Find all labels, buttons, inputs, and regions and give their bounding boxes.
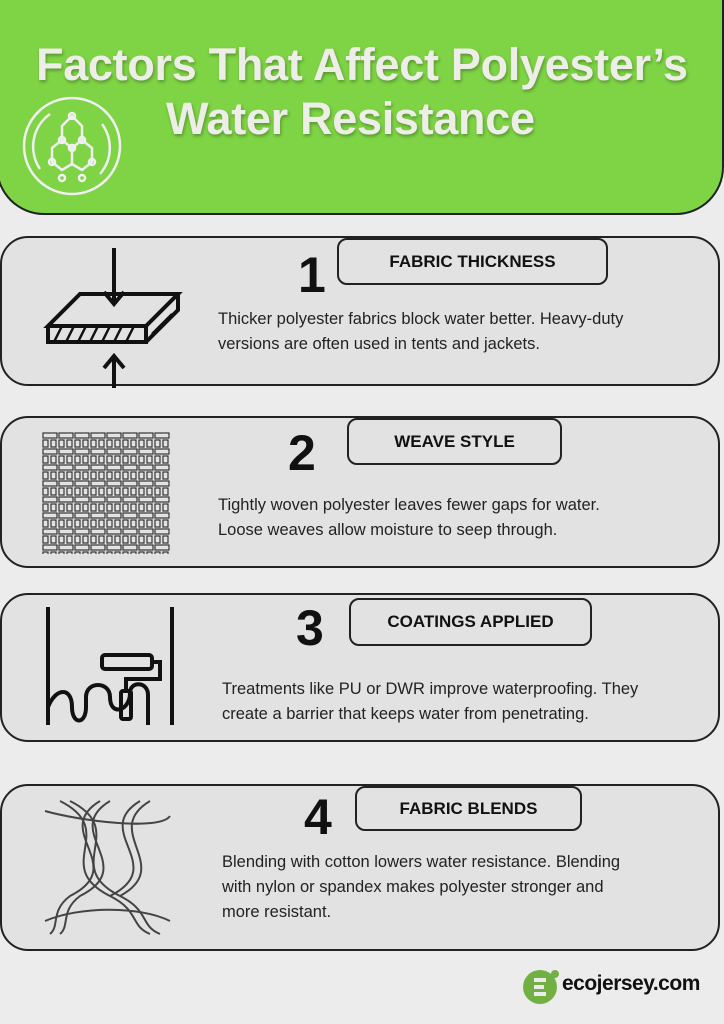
title (36, 39, 689, 144)
label: COATINGS APPLIED (387, 612, 554, 631)
title: Water Resistance (166, 93, 535, 144)
label: FABRIC BLENDS (400, 798, 537, 818)
panel: fabric blends (0, 784, 720, 951)
number 1: 1 (298, 247, 326, 303)
text: versions are often used in tents and jackets. (218, 335, 540, 353)
text: brand: ecojersey.com (562, 972, 700, 995)
icon: logo (523, 970, 559, 1004)
title: Factors That Affect Polyester’s (36, 39, 688, 90)
label: FABRIC THICKNESS (389, 252, 556, 270)
label: WEAVE STYLE (394, 432, 515, 450)
text: more resistant. (222, 903, 331, 921)
number 4: 4 (304, 789, 332, 845)
label (349, 598, 592, 646)
label (355, 786, 582, 831)
panel: fabric thickness (0, 236, 720, 386)
number 2: 2 (288, 425, 316, 481)
icon: twisted fibers (44, 800, 171, 935)
number 3: 3 (296, 600, 324, 656)
logo (523, 970, 700, 1004)
text: Thicker polyester fabrics block water better. Heavy-duty (218, 310, 623, 328)
text: with nylon or spandex makes polyester stronger and (222, 878, 604, 896)
text: Tightly woven polyester leaves fewer gaps for water. (218, 496, 600, 514)
icon: fabric slab (43, 248, 183, 388)
text (222, 680, 638, 723)
label (347, 418, 562, 465)
icon: weave (42, 432, 170, 554)
text (222, 853, 620, 921)
icon: paint roller (46, 607, 174, 725)
header (0, 0, 724, 215)
label (337, 238, 608, 285)
text: Loose weaves allow moisture to seep through. (218, 521, 557, 539)
text: Blending with cotton lowers water resistance. Blending (222, 853, 620, 871)
text (218, 310, 624, 353)
panel: weave style (0, 416, 720, 568)
icon: molecule (22, 96, 122, 196)
panel: coatings (0, 593, 720, 742)
text (218, 496, 600, 539)
text: Treatments like PU or DWR improve waterproofing. They (222, 680, 638, 698)
text: create a barrier that keeps water from penetrating. (222, 705, 589, 723)
